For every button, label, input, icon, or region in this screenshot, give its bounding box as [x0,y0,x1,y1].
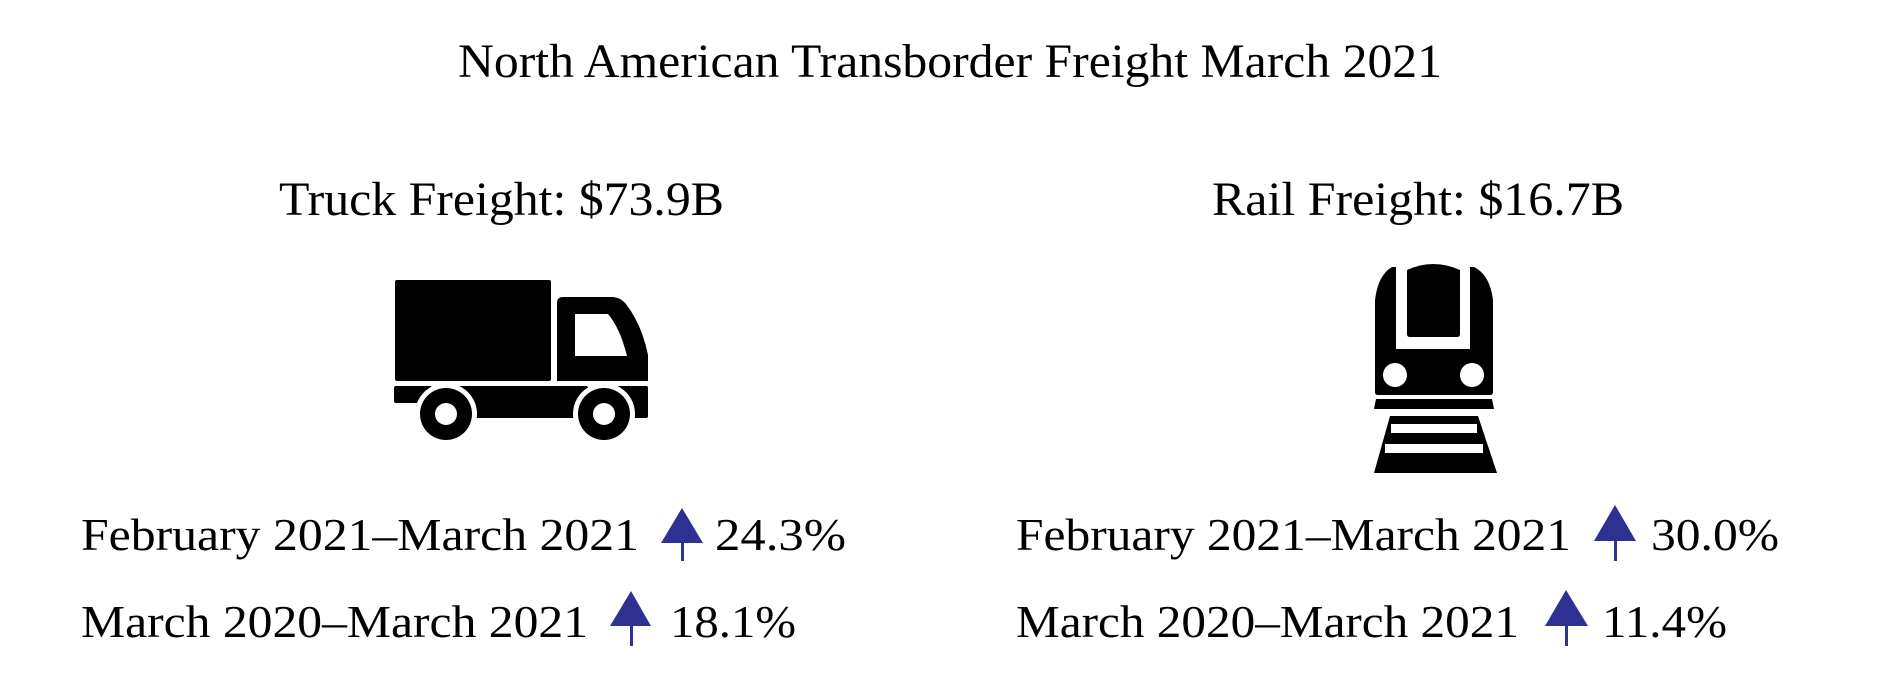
icon: train [1374,264,1497,473]
stat: rail month over month [1016,505,1779,561]
heading: rail freight: Rail Freight: $16.7B [1212,173,1624,226]
panel: truck freight [81,173,846,647]
title: North American Transborder Freight March 2021 [458,35,1442,88]
stat: rail month over month: 30.0% [1651,509,1779,560]
stat: truck month over month: 24.3% [715,509,846,560]
stat: truck month over month: February 2021–March 2021 [81,509,639,560]
stat: truck year over year: 18.1% [670,596,796,647]
stat: truck year over year: March 2020–March 2021 [81,596,588,647]
stat: rail month over month: February 2021–March 2021 [1016,509,1571,560]
stat: truck year over year [81,591,796,647]
heading: truck freight: Truck Freight: $73.9B [279,173,724,226]
arrow: up [1594,505,1636,561]
panel: rail freight [1016,173,1779,647]
arrow: up [661,508,703,561]
stat: rail year over year: 11.4% [1602,596,1727,647]
stat: truck month over month [81,508,846,561]
stat: rail year over year: March 2020–March 2021 [1016,596,1519,647]
arrow: up [610,591,651,646]
stat: rail year over year [1016,590,1727,647]
arrow: up [1545,590,1588,646]
icon: truck [394,280,648,445]
